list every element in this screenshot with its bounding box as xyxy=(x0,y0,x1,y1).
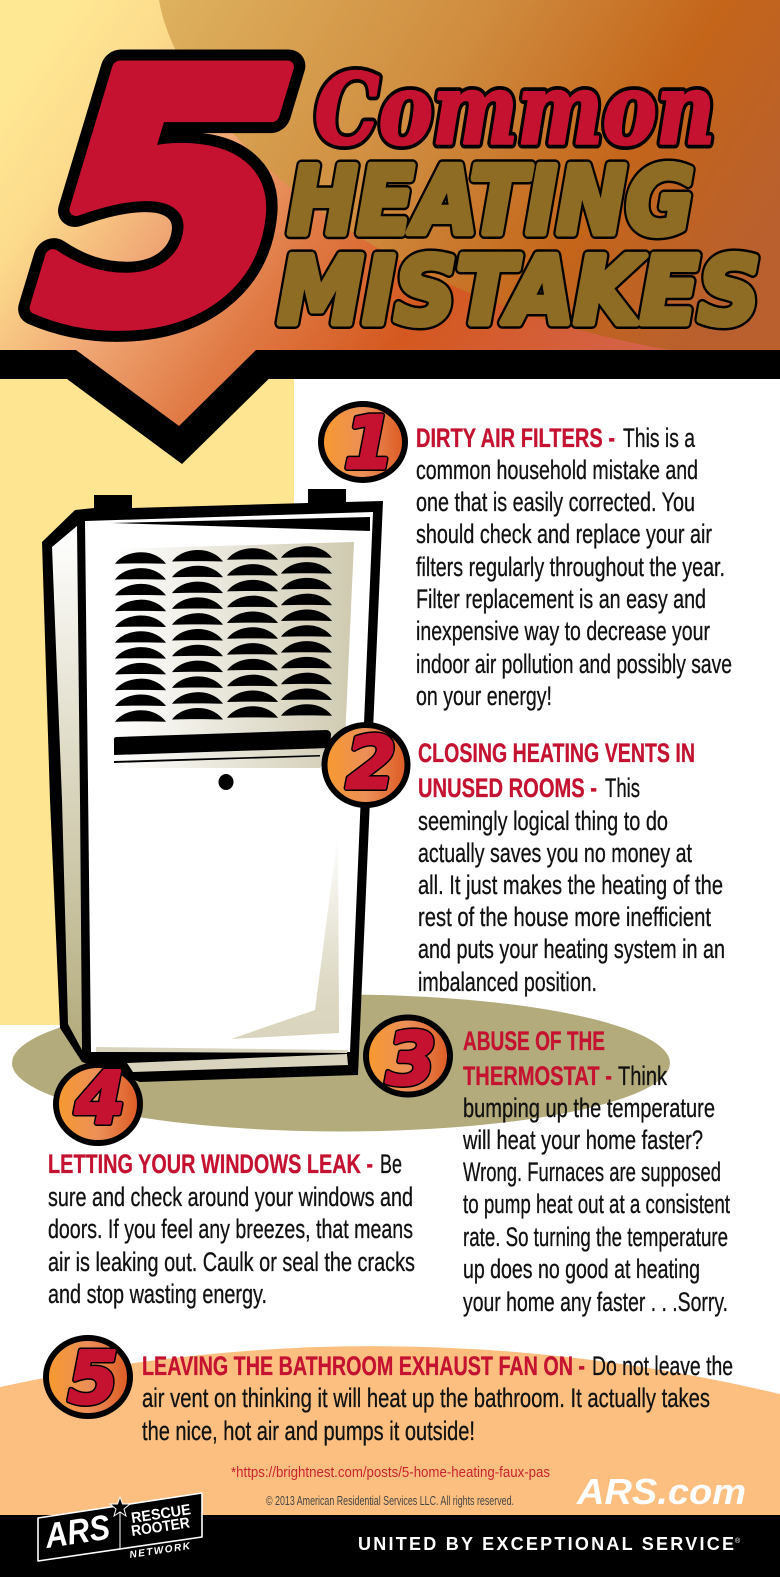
logo: ARS Rescue Rooter Network: RESCUE xyxy=(130,1501,192,1527)
copyright: © 2013 American Residential Services LLC. All rights reserved. xyxy=(266,1494,514,1508)
source link: *https://brightnest.com/posts/5-home-heating-faux-pas xyxy=(231,1464,550,1481)
badge 4 xyxy=(56,1056,140,1143)
title: Common: Common xyxy=(315,53,715,166)
heading: abuse of the thermostat: THERMOSTAT - xyxy=(463,1061,612,1091)
body: mistake 4: and stop wasting energy. xyxy=(48,1279,267,1309)
website: ARS.com xyxy=(576,1471,746,1512)
body: mistake 2: imbalanced position. xyxy=(418,967,597,997)
title: HEATING: HEATING xyxy=(288,147,694,255)
body: mistake 3: will heat your home faster? xyxy=(462,1125,703,1155)
body: mistake 5: the nice, hot air and pumps it outside! xyxy=(142,1416,475,1446)
badge 1: 1 xyxy=(344,401,394,485)
body: mistake 2 xyxy=(418,773,725,997)
body: mistake 1 xyxy=(416,423,732,711)
body: mistake 4: air is leaking out. Caulk or seal the cracks xyxy=(48,1247,415,1277)
title: Common: Common xyxy=(315,53,715,166)
badge 3 xyxy=(366,1017,450,1101)
badge 4: 4 xyxy=(74,1056,125,1140)
badge 5: 5 xyxy=(68,1336,118,1420)
body: mistake 3 xyxy=(462,1061,730,1317)
text block: mistake 3 xyxy=(462,1026,730,1317)
text block: mistake 2 xyxy=(418,738,725,997)
body: mistake 4 xyxy=(48,1149,415,1309)
body: mistake 2: This xyxy=(605,773,640,803)
body: mistake 4: doors. If you feel any breezes, that means xyxy=(48,1214,413,1244)
badge 3: 3 xyxy=(386,1017,436,1101)
heading: closing heating vents: UNUSED ROOMS - xyxy=(418,773,597,803)
badge 2: 2 xyxy=(346,721,396,805)
badge 4: 4 xyxy=(74,1056,125,1140)
body: mistake 2: seemingly logical thing to do xyxy=(418,806,668,836)
background: yellow panel xyxy=(0,379,294,1025)
text block: mistake 5 xyxy=(142,1351,733,1446)
badge 2: 2 xyxy=(346,721,396,805)
title: big numeral 5: 5 xyxy=(23,0,312,401)
logo: ARS Rescue Rooter Network: ARS xyxy=(42,1508,112,1556)
tagline: ® xyxy=(735,1537,741,1545)
badge 5 xyxy=(46,1336,130,1420)
heading: closing heating vents xyxy=(418,738,695,803)
footer band xyxy=(0,1515,780,1577)
text block: mistake 4 xyxy=(48,1149,415,1309)
heading: letting your windows leak: LETTING YOUR WINDOWS LEAK - xyxy=(48,1149,373,1179)
title: big numeral 5: 5 xyxy=(23,0,312,401)
body: mistake 1: on your energy! xyxy=(416,681,552,711)
body: mistake 4: sure and check around your windows and xyxy=(48,1182,413,1212)
logo: ARS Rescue Rooter Network xyxy=(38,1493,202,1561)
heading: abuse of the thermostat xyxy=(463,1026,612,1091)
logo: ARS Rescue Rooter Network: ROOTER xyxy=(130,1514,191,1540)
title: HEATING: HEATING xyxy=(288,147,694,255)
heading: abuse of the thermostat: ABUSE OF THE xyxy=(463,1026,605,1056)
text block: mistake 1 xyxy=(416,423,732,711)
furnace illustration xyxy=(42,489,383,1082)
body: mistake 4: Be xyxy=(380,1149,402,1179)
badge 5: 5 xyxy=(68,1336,118,1420)
heading: leaving the bathroom exhaust fan on: LEAVING THE BATHROOM EXHAUST FAN ON - xyxy=(142,1351,585,1381)
floor oval xyxy=(12,994,670,1132)
logo: ARS Rescue Rooter Network: NETWORK xyxy=(129,1541,192,1561)
badge 1 xyxy=(321,401,405,485)
body: mistake 1: This is a xyxy=(623,423,696,453)
badge 2 xyxy=(324,721,408,805)
badge 3: 3 xyxy=(386,1017,436,1101)
badge 1: 1 xyxy=(344,401,394,485)
header band with arrow xyxy=(0,0,780,464)
heading: dirty air filters: DIRTY AIR FILTERS - xyxy=(416,423,615,453)
tagline: UNITED BY EXCEPTIONAL SERVICE xyxy=(358,1534,734,1554)
body: mistake 5 xyxy=(142,1351,733,1446)
background: peach arc xyxy=(0,1346,780,1515)
body: mistake 3: Think xyxy=(618,1061,667,1091)
